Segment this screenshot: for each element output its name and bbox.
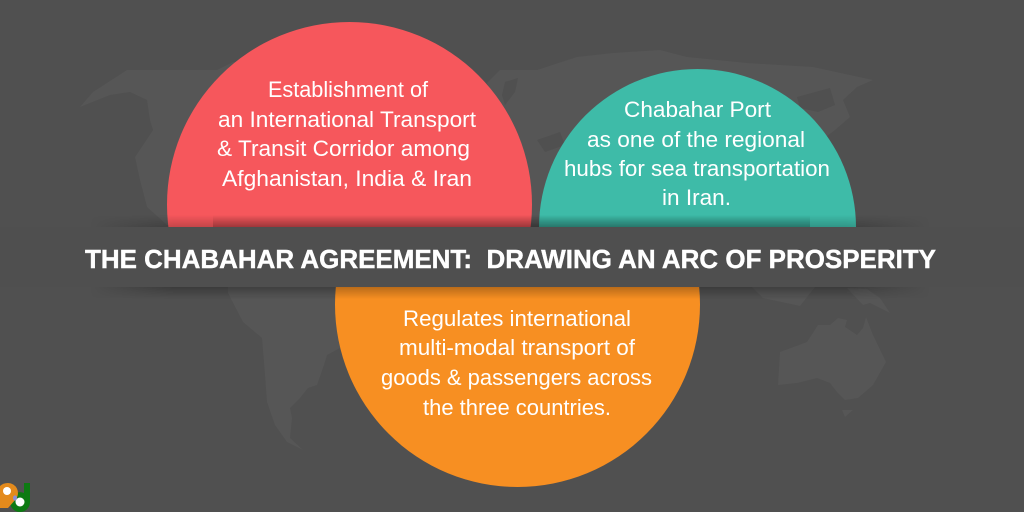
map: South America [228,287,345,450]
red circle text: Afghanistan, India & Iran [222,166,472,191]
map: Eurasia [487,50,873,227]
orange circle text: multi-modal transport of [399,335,636,360]
logo [0,483,30,512]
logo: orange ring [0,483,18,508]
red circle text [217,77,476,191]
teal circle text: Chabahar Port [624,97,771,122]
teal circle text: in Iran. [662,185,731,210]
orange circle text: the three countries. [423,395,611,420]
semicircle: teal [539,69,856,227]
teal circle text: hubs for sea transportation [564,156,830,181]
map: Tasmania [842,410,853,417]
title band [0,227,1024,287]
band shadows [124,216,896,298]
teal circle text: as one of the regional [587,127,805,152]
red circle text: an International Transport [218,107,476,132]
orange circle text: goods & passengers across [381,365,652,390]
teal circle text [564,97,830,210]
map: Indonesia [752,287,815,306]
title: THE CHABAHAR AGREEMENT: DRAWING AN ARC OF PROSPERITY [85,244,936,274]
logo: white dot left [3,487,11,495]
world map [80,50,890,450]
red circle text: & Transit Corridor among [217,136,470,161]
map: Black Sea [537,132,565,152]
red circle text: Establishment of [268,77,429,102]
logo: purple centre [13,495,17,501]
map: North America [80,60,300,228]
map: Baltic inlet [502,78,518,105]
logo: green d [10,483,30,512]
semicircle: orange [335,287,700,487]
map: Australia [778,317,886,400]
semicircle: red [167,22,532,227]
orange circle text: Regulates international [403,306,631,331]
orange circle text [381,306,652,420]
map: New Guinea [847,288,890,313]
logo: white dot right [16,498,24,506]
map: inland seas [502,78,835,152]
map: Sea of Okhotsk [797,88,835,112]
